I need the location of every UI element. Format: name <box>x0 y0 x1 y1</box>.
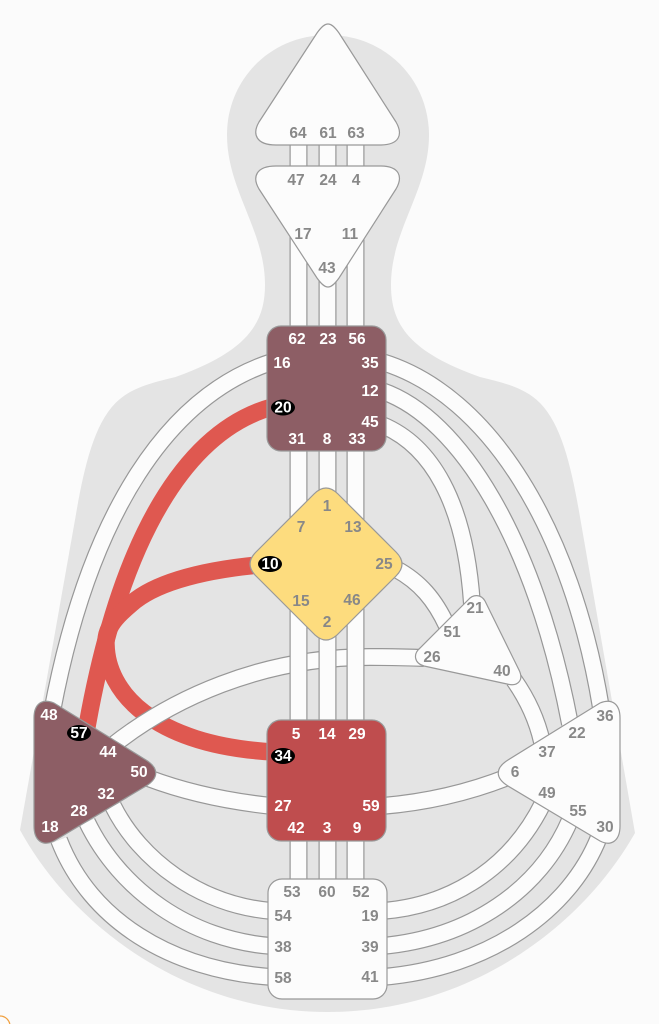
center: throat: 16 <box>273 355 291 372</box>
center: root: 41 <box>361 969 379 986</box>
center: ajna: 24 <box>319 172 337 189</box>
center: root: 19 <box>361 908 379 925</box>
center: heart: 40 <box>493 663 511 680</box>
center: throat: 56 <box>348 331 366 348</box>
center: throat: 62 <box>288 331 306 348</box>
channel 18-58 <box>59 840 272 977</box>
center: heart: 21 <box>466 600 484 617</box>
center: root: 60 <box>318 884 336 901</box>
center: ajna: 47 <box>287 172 305 189</box>
center: throat <box>267 326 386 451</box>
center: sacral: 27 <box>274 798 292 815</box>
center: throat: 31 <box>288 431 306 448</box>
center: root: 39 <box>361 939 379 956</box>
center: sacral: 29 <box>348 726 366 743</box>
channel 19-49 <box>382 803 543 911</box>
center: spleen: 44 <box>99 744 117 761</box>
active channel 10-34 <box>106 565 274 752</box>
channel 35-36 <box>382 362 601 708</box>
channel 16-48 <box>52 362 272 712</box>
channel 41-30 <box>382 837 599 977</box>
center: G side triangle: 22 <box>568 725 586 742</box>
center: G side triangle: 6 <box>511 764 520 781</box>
center: G: 46 <box>343 592 361 609</box>
center: G: 1 <box>323 498 332 515</box>
center: sacral <box>267 720 386 841</box>
center: root: 53 <box>283 884 301 901</box>
channel 59-6 <box>382 777 508 806</box>
center: G side triangle <box>498 701 620 843</box>
center: G side triangle: 49 <box>538 785 556 802</box>
center: sacral: 3 <box>323 820 332 837</box>
center: G side triangle: 30 <box>596 819 614 836</box>
channel 50-27 <box>148 778 272 806</box>
center: sacral: 5 <box>292 726 301 743</box>
center: G: 13 <box>344 519 362 536</box>
center: G side triangle: 37 <box>538 744 556 761</box>
center: throat: 45 <box>361 414 379 431</box>
center: G: 15 <box>292 593 310 610</box>
center: G: 7 <box>297 519 305 536</box>
center: throat: 35 <box>361 355 379 372</box>
center: throat: 23 <box>319 331 337 348</box>
channel 39-55 <box>382 820 570 946</box>
center: heart: 51 <box>443 624 461 641</box>
center: spleen: 32 <box>97 786 115 803</box>
vertical channels left column <box>290 140 308 885</box>
channel 44-26 <box>112 657 424 746</box>
center: ajna <box>256 166 399 287</box>
center: ajna: 4 <box>352 172 361 189</box>
active gate 34: 34 <box>274 748 292 765</box>
center: throat: 8 <box>323 431 332 448</box>
center: sacral: 9 <box>353 820 362 837</box>
center: heart: 26 <box>423 649 441 666</box>
center: spleen <box>34 701 156 843</box>
center: root: 54 <box>274 908 292 925</box>
corner orange arc <box>0 1016 10 1024</box>
center: root: 52 <box>352 884 370 901</box>
channel 45-21 <box>382 425 472 604</box>
center: root: 58 <box>274 970 292 987</box>
center: heart <box>415 596 521 685</box>
center: G <box>250 488 402 640</box>
vertical channels centre column <box>318 140 336 885</box>
center: root <box>268 879 387 999</box>
channel 40-37 <box>514 680 542 742</box>
center: root: 38 <box>274 939 292 956</box>
center: head <box>256 24 399 145</box>
center: G side triangle: 55 <box>569 803 587 820</box>
vertical channels right column <box>346 140 364 885</box>
active gate 57: 57 <box>70 725 88 742</box>
center: throat: 12 <box>361 383 379 400</box>
center: head: 63 <box>347 125 365 142</box>
center: throat: 33 <box>348 431 366 448</box>
center: spleen: 18 <box>41 819 59 836</box>
center: head: 64 <box>289 125 307 142</box>
center: head: 61 <box>319 125 337 142</box>
channel 25-51 <box>396 569 447 626</box>
active gate 10: 10 <box>261 556 279 573</box>
center: spleen: 28 <box>70 803 88 820</box>
channel 32-54 <box>113 806 272 911</box>
center: sacral: 59 <box>362 798 380 815</box>
center: ajna: 17 <box>294 226 312 243</box>
center: spleen: 50 <box>130 764 148 781</box>
center: sacral: 14 <box>318 726 336 743</box>
active gate 20: 20 <box>274 400 292 416</box>
center: ajna: 11 <box>342 226 359 243</box>
channel 12-22 <box>382 391 570 724</box>
channel 28-38 <box>87 822 272 946</box>
center: G: 25 <box>375 556 393 573</box>
active channel 20-57 <box>85 407 272 738</box>
center: sacral: 42 <box>287 820 305 837</box>
center: ajna: 43 <box>318 260 336 277</box>
center: G: 2 <box>323 614 331 631</box>
center: spleen: 48 <box>40 707 58 724</box>
center: G side triangle: 36 <box>596 708 614 725</box>
